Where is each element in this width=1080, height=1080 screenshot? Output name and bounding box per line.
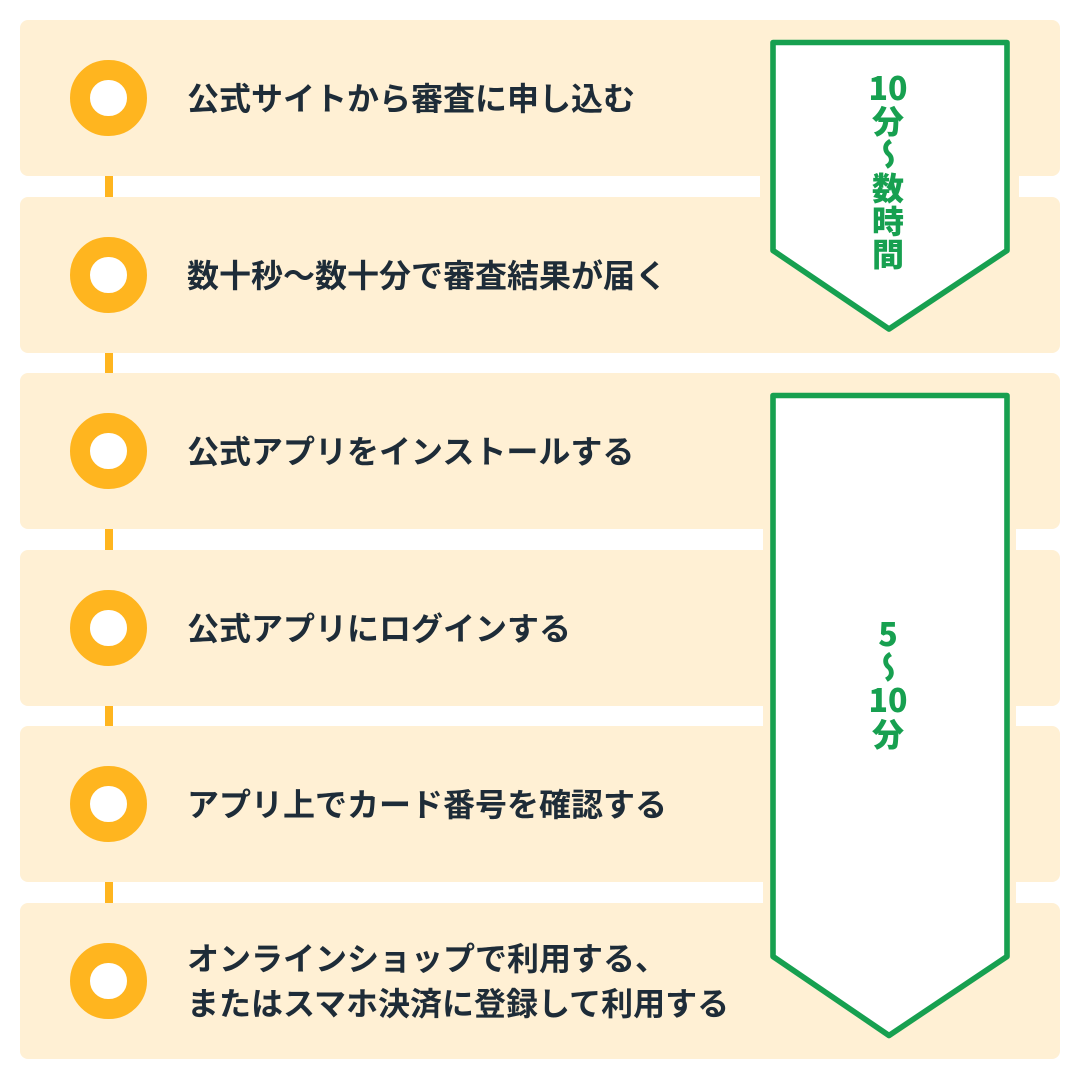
panel: step 1 [20,20,1060,176]
step 5 text: アプリ上でカード番号を確認する [187,780,667,826]
panel: step 6 [20,903,1060,1059]
label: 10分〜数時間: 間 [872,230,904,276]
label: 5〜10分: 分 [872,710,904,756]
gap patches behind second arrow [763,529,1016,903]
icon: step 2 ring [70,236,146,313]
panel: step 4 [20,550,1060,706]
label: 10分〜数時間: 数 [872,164,904,210]
label: 5〜10分: 10 [868,676,907,722]
label: 5〜10分 [866,610,912,756]
step 4 text: 公式アプリにログインする [187,604,571,650]
panel: step 3 [20,373,1060,529]
step 6 text: オンラインショップで利用する、 [187,934,667,980]
label: 10分〜数時間: 時 [872,197,904,243]
icon: step 1 ring [70,60,146,136]
connector 2 [104,353,112,374]
label: 5〜10分: 5 [878,610,898,656]
connector 1 [104,176,112,197]
step 3 text: 公式アプリをインストールする [187,427,634,473]
label: 10分〜数時間: ～ [866,138,912,170]
panel: step 5 [20,726,1060,882]
connector 5 [104,882,112,903]
step 6 text [187,934,729,1025]
icon: step 6 ring [70,942,146,1019]
icon: step 4 ring [70,590,146,666]
connector 4 [104,706,112,727]
panel: step 2 [20,197,1060,353]
step 1 text: 公式サイトから審査に申し込む [187,74,635,120]
step 6 text: またはスマホ決済に登録して利用する [187,979,729,1025]
label: 10分〜数時間 [866,64,912,276]
label: 10分〜数時間: 分 [872,97,904,143]
gap patch behind first arrow [760,176,1019,197]
icon: step 3 ring [70,412,146,489]
connector 3 [104,529,112,550]
label: 5〜10分: ～ [866,651,912,683]
icon: step 5 ring [70,766,146,842]
label: 10分〜数時間: 10 [868,64,907,110]
step 2 text: 数十秒～数十分で審査結果が届く [187,251,667,297]
